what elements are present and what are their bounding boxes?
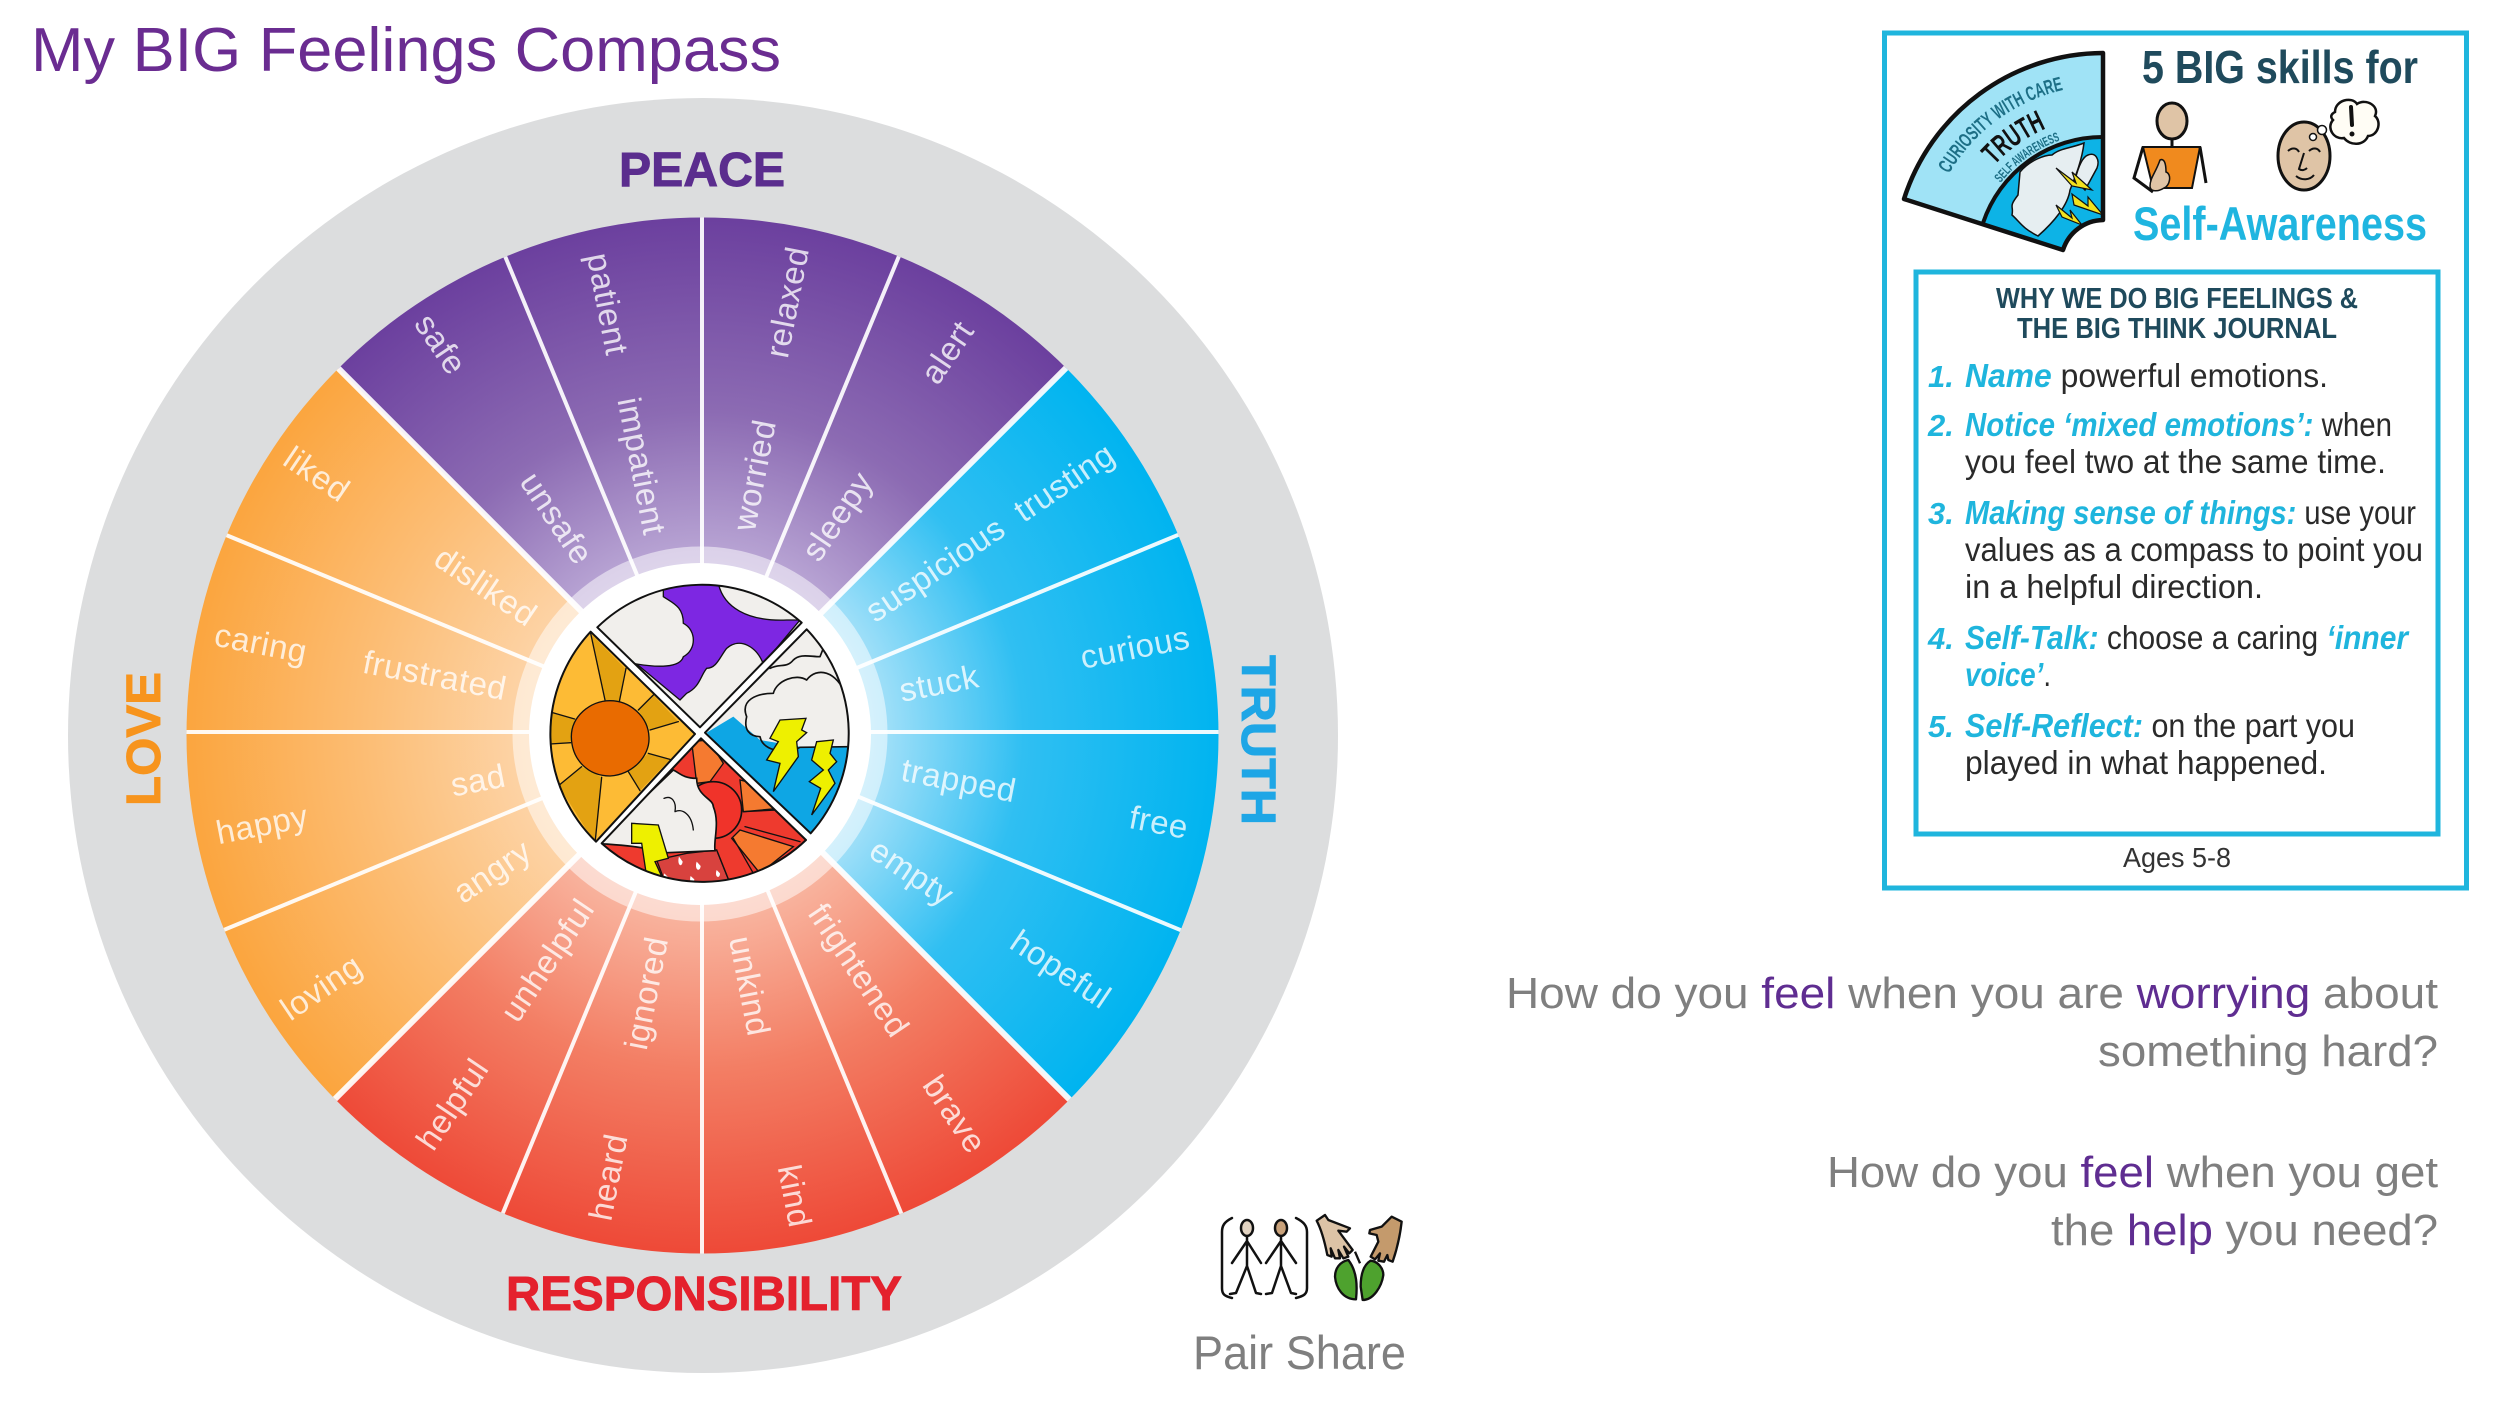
feeling words: angry <box>446 832 538 910</box>
PEACE label: PEACE <box>619 144 785 197</box>
skill 5: played in what happened. <box>1965 744 2327 781</box>
feeling words: impatient <box>610 394 673 538</box>
question 2 <box>1827 1148 2438 1255</box>
feeling words: happy <box>213 797 311 851</box>
feeling words: sleepy <box>794 465 880 567</box>
feeling words: hopeful <box>1004 922 1118 1016</box>
feeling words: frightened <box>801 896 917 1044</box>
feeling words: stuck <box>896 657 982 709</box>
feeling words: unkind <box>722 933 778 1039</box>
question 1: something hard? <box>2098 1027 2438 1076</box>
feeling words: disliked <box>428 539 544 633</box>
icon: truth wedge: SELF AWARENESS <box>1994 132 2060 182</box>
pair share label: Pair Share <box>1193 1326 1406 1379</box>
feeling words: relaxed <box>758 243 816 361</box>
icon: orange sun <box>543 627 700 847</box>
feeling words: alert <box>913 314 981 390</box>
icon: purple sky with clouds <box>596 584 803 728</box>
feeling words: patient <box>580 250 636 358</box>
skill 5: 5. <box>1928 709 1954 744</box>
feeling words: worried <box>725 416 783 535</box>
feeling words: ignored <box>617 933 675 1053</box>
skill 4 <box>1927 619 2410 693</box>
skill 2: 2. <box>1927 408 1954 443</box>
grey outer ring <box>68 98 1338 1373</box>
skill 3: in a helpful direction. <box>1965 568 2263 605</box>
orange LOVE quadrant <box>186 368 579 1099</box>
skill 4: 4. <box>1927 621 1954 656</box>
skill 2: you feel two at the same time. <box>1965 443 2386 480</box>
skill 2 <box>1927 406 2392 480</box>
icon: person pointing to self <box>2134 103 2206 192</box>
icon: thinking face <box>2278 100 2379 190</box>
question 2: the help you need? <box>2051 1206 2438 1255</box>
skill 4: voice’. <box>1965 656 2051 693</box>
list heading: THE BIG THINK JOURNAL <box>2017 313 2337 345</box>
feeling words: loving <box>273 947 369 1027</box>
card subheading: Self-Awareness <box>2133 197 2427 250</box>
icon: storm clouds on blue sky <box>704 628 850 834</box>
icon: hands sharing a split leaf <box>1317 1215 1402 1300</box>
icon: truth wedge <box>1902 50 2106 252</box>
RESPONSIBILITY label: RESPONSIBILITY <box>506 1268 902 1321</box>
skill 5 <box>1928 707 2355 781</box>
card heading: 5 BIG skills for <box>2142 41 2418 93</box>
feeling words: empty <box>863 831 961 913</box>
skills card <box>1882 30 2469 890</box>
feeling words: unsafe <box>513 465 601 571</box>
question 1: How do you feel when you are worrying about <box>1506 969 2438 1018</box>
feeling words: heard <box>582 1131 635 1223</box>
ages note: Ages 5-8 <box>2123 842 2231 873</box>
feeling words: helpful <box>408 1052 496 1156</box>
feeling words: safe <box>408 307 474 381</box>
skill 1: 1. <box>1928 359 1954 394</box>
feeling words: frustrated <box>360 643 510 707</box>
feeling words <box>212 243 1193 1230</box>
feeling words: kind <box>771 1162 819 1230</box>
feeling words: liked <box>277 439 357 509</box>
card outer border <box>1884 33 2466 888</box>
icon: sun behind rain cloud <box>600 737 807 883</box>
blue TRUTH quadrant <box>823 368 1218 1100</box>
feeling words: unhelpful <box>493 892 601 1028</box>
feeling words: curious <box>1077 618 1193 676</box>
icon: truth wedge: CURIOSITY WITH CARE <box>1939 76 2063 172</box>
central weather illustration <box>549 584 850 883</box>
LOVE label: LOVE <box>118 672 171 806</box>
skill 3: 3. <box>1928 496 1954 531</box>
red RESPONSIBILITY quadrant <box>335 855 1070 1254</box>
skill 5: Self-Reflect: on the part you <box>1965 707 2355 744</box>
feeling words: caring <box>212 616 310 670</box>
skill 2: Notice ‘mixed emotions’: when <box>1965 406 2392 443</box>
question 1 <box>1506 969 2438 1076</box>
icon: two people in brackets <box>1222 1218 1307 1298</box>
feeling words: trusting <box>1007 435 1121 529</box>
feeling words: free <box>1126 798 1192 846</box>
title: My BIG Feelings Compass <box>31 16 781 85</box>
feeling words: trapped <box>898 751 1020 809</box>
feeling words: brave <box>916 1068 994 1160</box>
feeling words: sad <box>447 757 509 803</box>
skill 3: Making sense of things: use your <box>1965 494 2416 531</box>
compass wheel <box>68 98 1338 1373</box>
skill 1: Name powerful emotions. <box>1965 357 2328 394</box>
skill 3 <box>1928 494 2423 605</box>
list heading: WHY WE DO BIG FEELINGS & <box>1996 283 2358 315</box>
feeling words: suspicious <box>858 509 1012 629</box>
question 2: How do you feel when you get <box>1827 1148 2438 1197</box>
purple PEACE quadrant <box>338 218 1066 611</box>
skill 3: values as a compass to point you <box>1965 531 2423 568</box>
icon: pair share <box>1193 1215 1406 1379</box>
skill 4: Self-Talk: choose a caring ‘inner <box>1965 619 2410 656</box>
inner list box <box>1916 272 2438 834</box>
icon: truth wedge: TRUTH <box>1980 110 2045 162</box>
TRUTH label: TRUTH <box>1231 655 1284 825</box>
list heading <box>1996 283 2358 345</box>
